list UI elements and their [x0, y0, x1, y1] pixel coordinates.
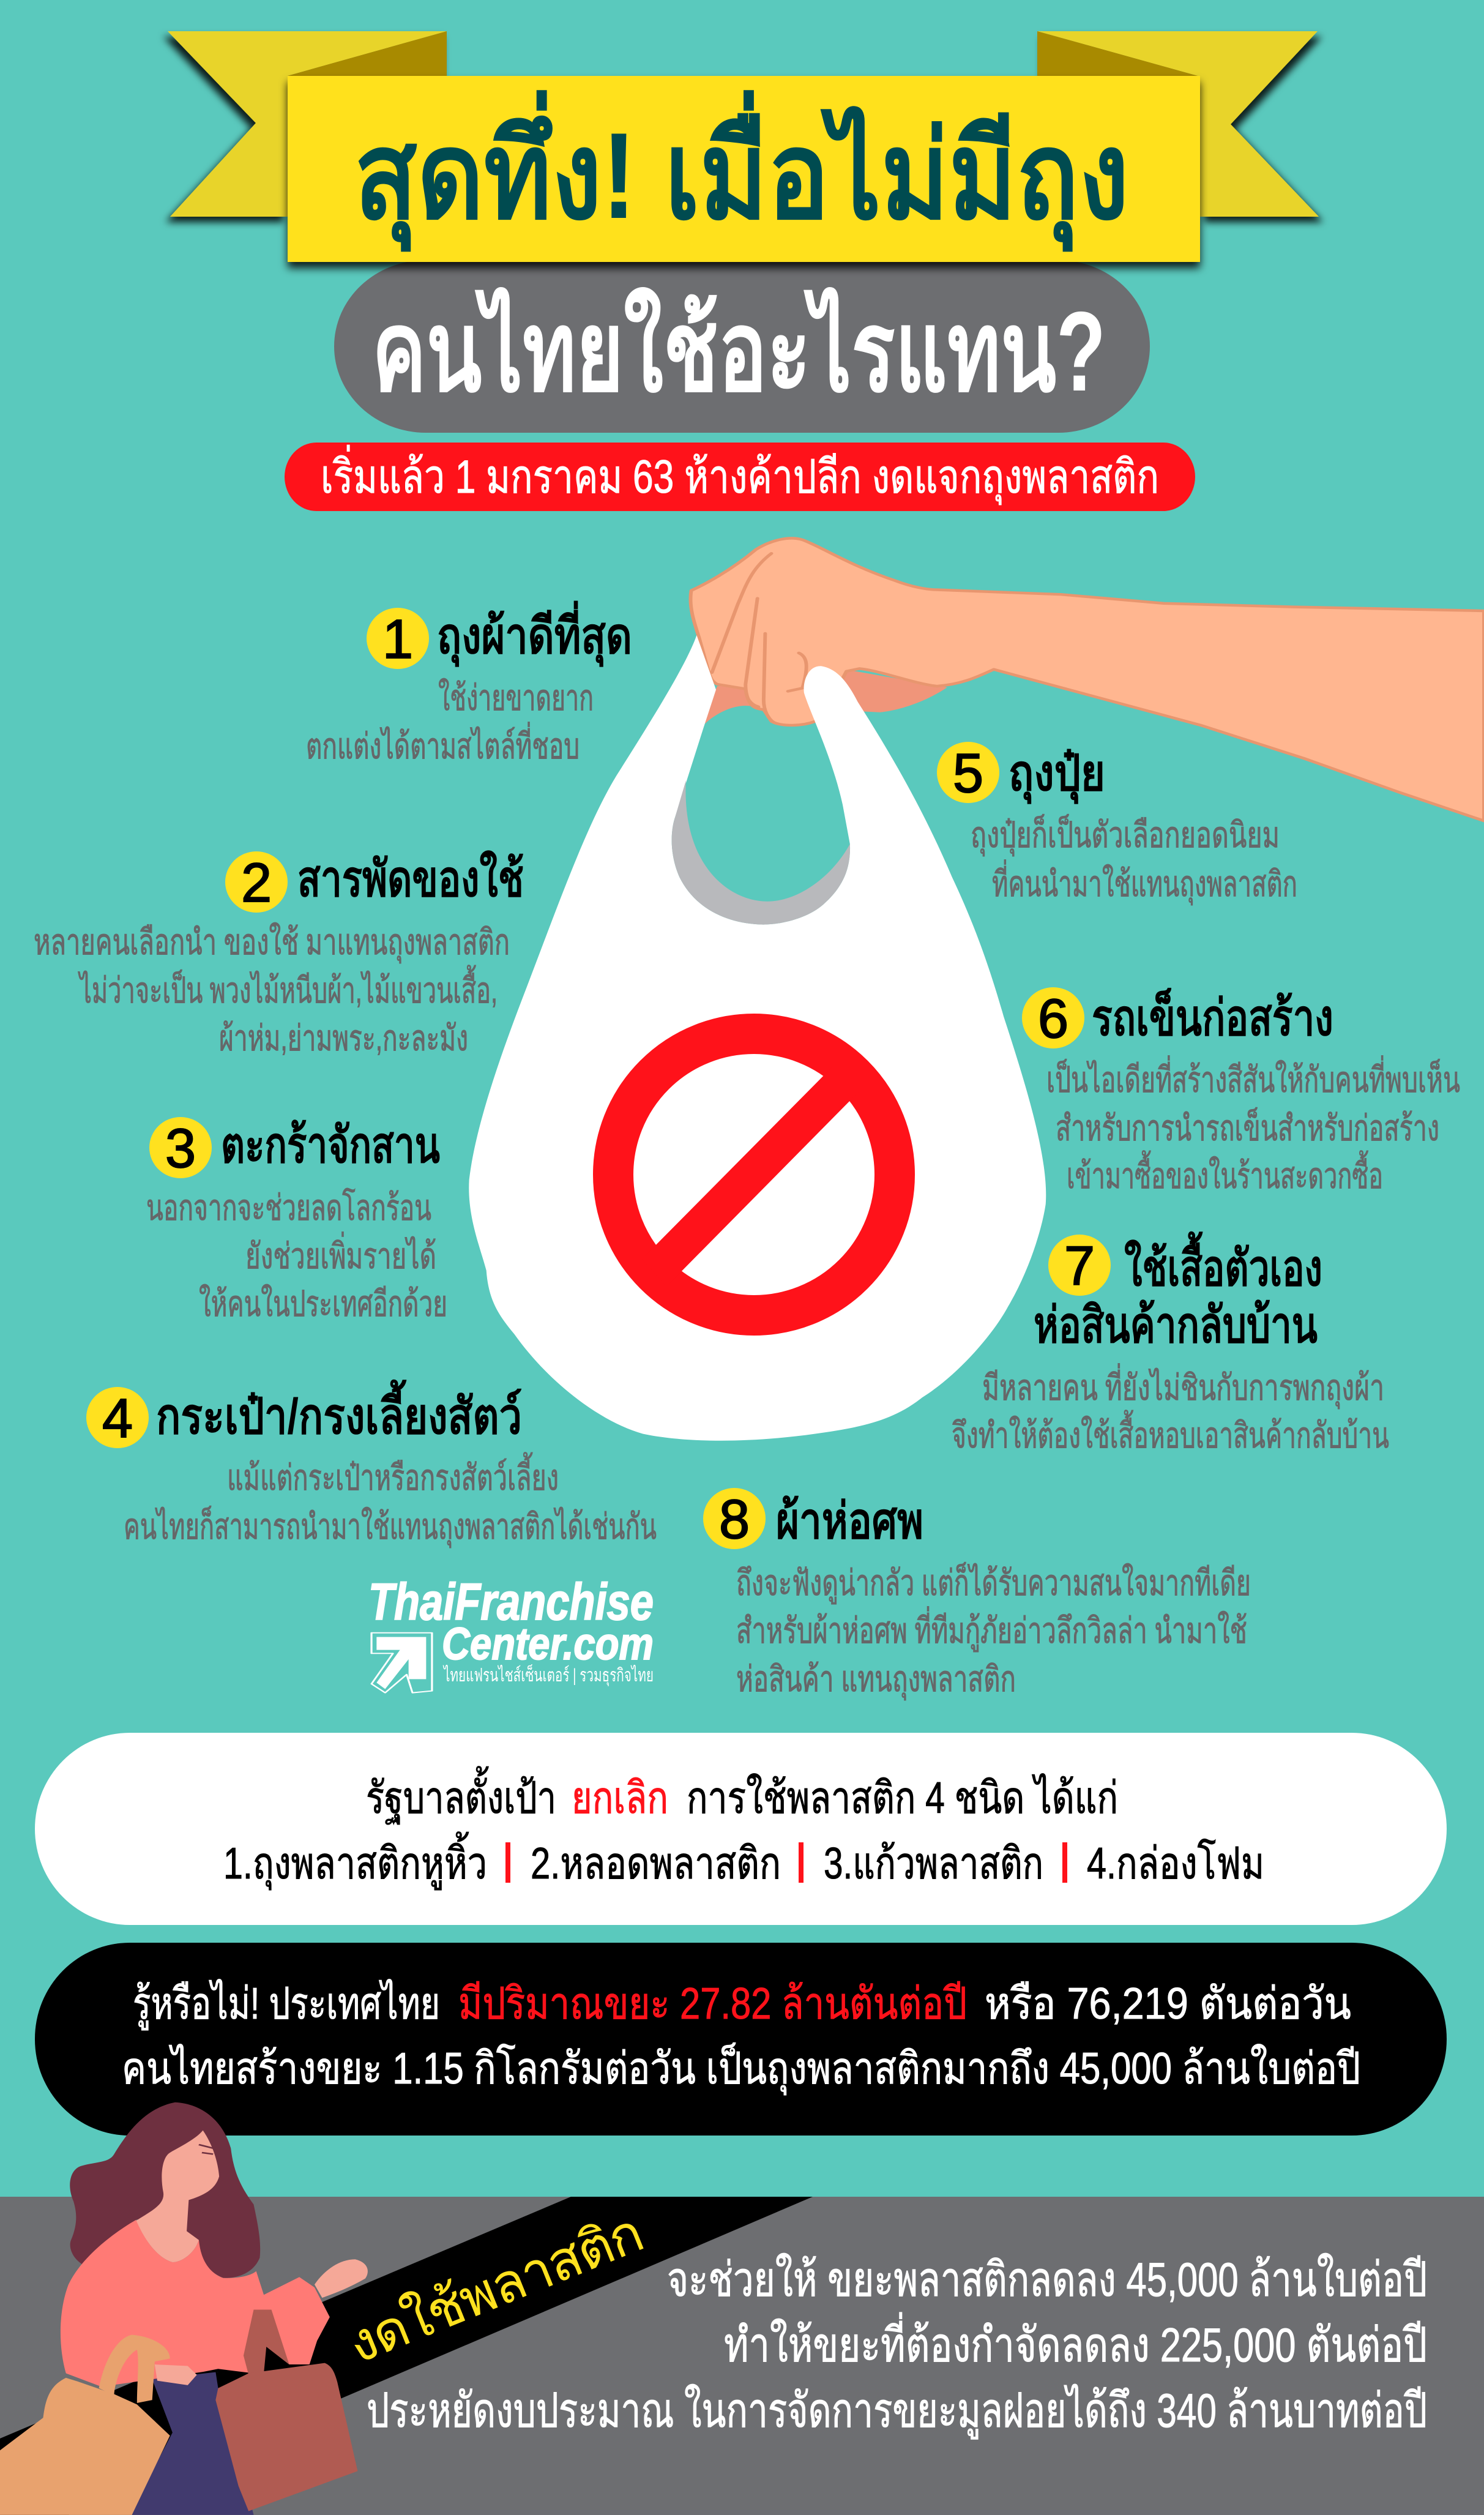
- item 8: สำหรับผ้าห่อศพ ที่ทีมกู้ภัยอ่าวลึกวิลล่า นำมาใช้: [736, 1606, 1247, 1652]
- red date pill: เริ่มแล้ว 1 มกราคม 63 ห้างค้าปลีก งดแจกถุงพลาสติก: [321, 445, 1159, 505]
- white panel: government targets: 2.หลอดพลาสติก: [531, 1839, 781, 1888]
- item 7: 7: [1064, 1236, 1095, 1297]
- white panel: government targets: 3.แก้วพลาสติก: [824, 1839, 1043, 1888]
- item 3: ตะกร้าจักสาน: [221, 1118, 440, 1173]
- item 8: ถึงจะฟังดูน่ากลัว แต่ก็ได้รับความสนใจมากทีเดีย: [736, 1562, 1251, 1604]
- red date pill: [285, 443, 1195, 511]
- white panel: government targets: การใช้พลาสติก 4 ชนิด ได้แก่: [687, 1773, 1118, 1823]
- hand and arm: [690, 538, 1484, 821]
- item 1: ถุงผ้าดีที่สุด: [437, 600, 632, 667]
- black panel: waste statistics: หรือ 76,219 ตันต่อวัน: [985, 1979, 1351, 2028]
- logo: ThaiFranchise Center.com: Center.com: [442, 1618, 654, 1669]
- illustration: woman carrying cloth bags: [0, 2102, 368, 2515]
- black diagonal ribbon with slogan: งดใช้พลาสติก: [340, 2202, 652, 2375]
- black panel: waste statistics: รู้หรือไม่! ประเทศไทย: [133, 1979, 440, 2030]
- item 8: [703, 1488, 1251, 1701]
- main title: [288, 76, 1200, 262]
- item 8: ห่อสินค้า แทนถุงพลาสติก: [736, 1659, 1016, 1701]
- item 2: ไม่ว่าจะเป็น พวงไม้หนีบผ้า,ไม้แขวนเสื้อ,: [78, 965, 498, 1011]
- item 5: ถุงปุ๋ยก็เป็นตัวเลือกยอดนิยม: [971, 814, 1280, 857]
- logo: ThaiFranchise Center.com: ไทยแฟรนไชส์เซ็นเตอร์ | รวมธุรกิจไทย: [443, 1664, 654, 1687]
- item 2: หลายคนเลือกนำ ของใช้ มาแทนถุงพลาสติก: [34, 922, 510, 964]
- logo: ThaiFranchise Center.com: [368, 1573, 654, 1693]
- white panel: government targets: 1.ถุงพลาสติกหูหิ้ว: [223, 1831, 487, 1890]
- item 2: ผ้าห่ม,ย่ามพระ,กะละมัง: [219, 1018, 468, 1058]
- item 3: [146, 1117, 447, 1324]
- item 6: 6: [1038, 988, 1068, 1050]
- illustration: hand holding plastic bag: [469, 538, 1484, 1441]
- item 5: ที่คนนำมาใช้แทนถุงพลาสติก: [992, 859, 1297, 906]
- bag back handle shadow: [672, 780, 850, 925]
- item 8: ผ้าห่อศพ: [776, 1493, 923, 1549]
- item 4: คนไทยก็สามารถนำมาใช้แทนถุงพลาสติกได้เช่นกัน: [124, 1506, 657, 1549]
- title banner: [168, 31, 1319, 433]
- brown bag: [215, 2310, 357, 2511]
- black panel: waste statistics: [35, 1943, 1447, 2136]
- item 5: [937, 742, 1297, 906]
- item 3: นอกจากจะช่วยลดโลกร้อน: [146, 1187, 431, 1228]
- white panel: government targets: ยกเลิก: [572, 1774, 668, 1823]
- item 6: รถเข็นก่อสร้าง: [1092, 987, 1333, 1046]
- bottom gray band: [0, 2197, 1484, 2515]
- item 4: [86, 1379, 657, 1549]
- item 7: [952, 1231, 1389, 1456]
- item 1: ใช้ง่ายขาดยาก: [438, 678, 594, 718]
- black diagonal ribbon with slogan: [0, 2197, 813, 2515]
- item 4: กระเป๋า/กรงเลี้ยงสัตว์: [156, 1379, 522, 1444]
- item 8: 8: [719, 1489, 750, 1550]
- woman blouse: [61, 2220, 330, 2386]
- black panel: waste statistics: มีปริมาณขยะ 27.82 ล้านตันต่อปี: [458, 1979, 967, 2028]
- woman pants: [129, 2372, 253, 2515]
- item 3: ให้คนในประเทศอีกด้วย: [199, 1284, 447, 1324]
- item 5: 5: [953, 743, 983, 804]
- woman raised hand: [315, 2259, 368, 2298]
- woman lower hand: [155, 2364, 197, 2385]
- logo: ThaiFranchise Center.com: ThaiFranchise: [368, 1573, 654, 1631]
- item 2: สารพัดของใช้: [297, 850, 524, 907]
- white panel: government targets: 4.กล่องโฟม: [1087, 1838, 1264, 1888]
- logo arrow icon: [371, 1633, 432, 1693]
- subtitle pill: คนไทยใช้อะไรแทน?: [372, 287, 1106, 415]
- plastic bag: [469, 635, 1046, 1441]
- item 2: 2: [241, 853, 272, 914]
- item 3: 3: [165, 1118, 196, 1179]
- item 6: [1022, 987, 1460, 1196]
- woman face and neck: [136, 2131, 219, 2262]
- woman hair: [70, 2102, 260, 2278]
- savings text: [367, 2252, 1427, 2439]
- item 7: ห่อสินค้ากลับบ้าน: [1034, 1298, 1318, 1353]
- subtitle pill: [334, 260, 1150, 433]
- orange bag: [0, 2335, 170, 2515]
- item 3: ยังช่วยเพิ่มรายได้: [245, 1231, 436, 1276]
- item 5: ถุงปุ๋ย: [1009, 746, 1105, 804]
- item 7: ใช้เสื้อตัวเอง: [1124, 1231, 1322, 1296]
- main title: สุดทึ่ง! เมื่อไม่มีถุง: [354, 90, 1129, 252]
- item 2: [34, 850, 524, 1058]
- prohibition sign: [613, 1034, 895, 1315]
- white panel: government targets: [35, 1733, 1447, 1925]
- item 1: ตกแต่งได้ตามสไตล์ที่ชอบ: [306, 722, 580, 766]
- item 4: 4: [102, 1388, 133, 1449]
- item 4: แม้แต่กระเป๋าหรือกรงสัตว์เลี้ยง: [227, 1452, 559, 1498]
- item 1: [306, 600, 632, 766]
- banner ribbon left tail: [168, 31, 447, 217]
- item 1: 1: [382, 609, 413, 670]
- banner ribbon right tail: [1037, 31, 1319, 217]
- white panel: government targets: รัฐบาลตั้งเป้า: [366, 1766, 556, 1825]
